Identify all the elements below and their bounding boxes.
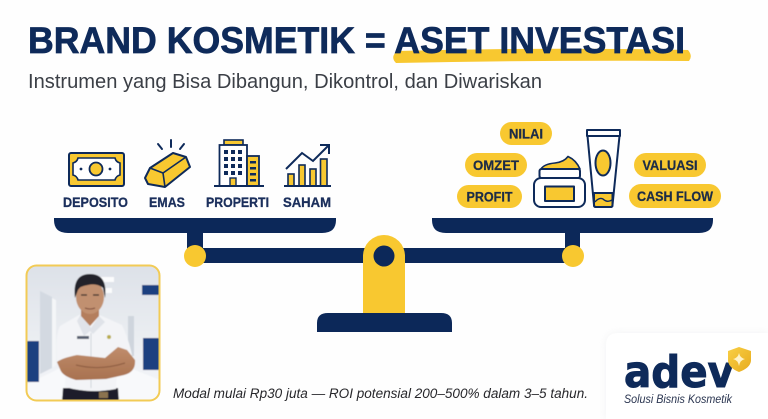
title text: BRAND KOSMETIK = ASET INVESTASI (28, 20, 685, 61)
left tray (54, 218, 336, 233)
man: head (76, 280, 104, 314)
man: crossed arms (57, 347, 135, 380)
balance scale (54, 218, 713, 332)
icon: banknote (69, 153, 124, 186)
pill: valuasi: VALUASI (642, 158, 698, 173)
icon: cream jar (534, 156, 585, 207)
pill: profit: PROFIT (466, 190, 513, 204)
label: deposito: DEPOSITO (63, 194, 128, 210)
asset labels (63, 194, 331, 210)
title (28, 20, 691, 63)
title highlight underline (393, 49, 691, 63)
pill: valuasi (634, 153, 706, 177)
man: trousers and belt (62, 388, 119, 402)
icon: rising stock chart (284, 145, 331, 187)
caption: Modal mulai Rp30 juta — ROI potensial 200–500% dalam 3–5 tahun. (173, 386, 588, 401)
icon: buildings (214, 140, 264, 187)
logo tagline: Solusi Bisnis Kosmetik (624, 394, 733, 406)
portrait photo (26, 264, 160, 402)
beam (195, 248, 573, 263)
icon: cosmetic tube (587, 130, 620, 207)
logo shield (728, 347, 751, 372)
pill: cash flow: CASH FLOW (637, 189, 713, 204)
pill: omzet: OMZET (473, 158, 520, 173)
pill: nilai: NILAI (509, 126, 543, 142)
pill: nilai (500, 122, 552, 145)
man: shirt (56, 312, 132, 391)
pivot (374, 246, 394, 266)
label: saham: SAHAM (283, 194, 331, 210)
left post (187, 232, 203, 252)
subtitle: Instrumen yang Bisa Dibangun, Dikontrol, dan Diwariskan (28, 70, 542, 93)
logo card (606, 333, 768, 419)
logo wordmark: adev (624, 347, 734, 398)
label: emas: EMAS (149, 194, 185, 210)
right tray (432, 218, 713, 233)
pill: profit (457, 185, 522, 208)
pillar (363, 235, 405, 314)
pill: omzet (465, 153, 527, 177)
icon: gold bar (145, 140, 190, 187)
base (317, 313, 452, 332)
left joint (184, 245, 206, 267)
pill: cash flow (629, 184, 721, 208)
right joint (562, 245, 584, 267)
label: properti: PROPERTI (206, 194, 269, 210)
man: neck (80, 310, 100, 326)
hallway background (28, 266, 158, 385)
right post (565, 232, 580, 252)
